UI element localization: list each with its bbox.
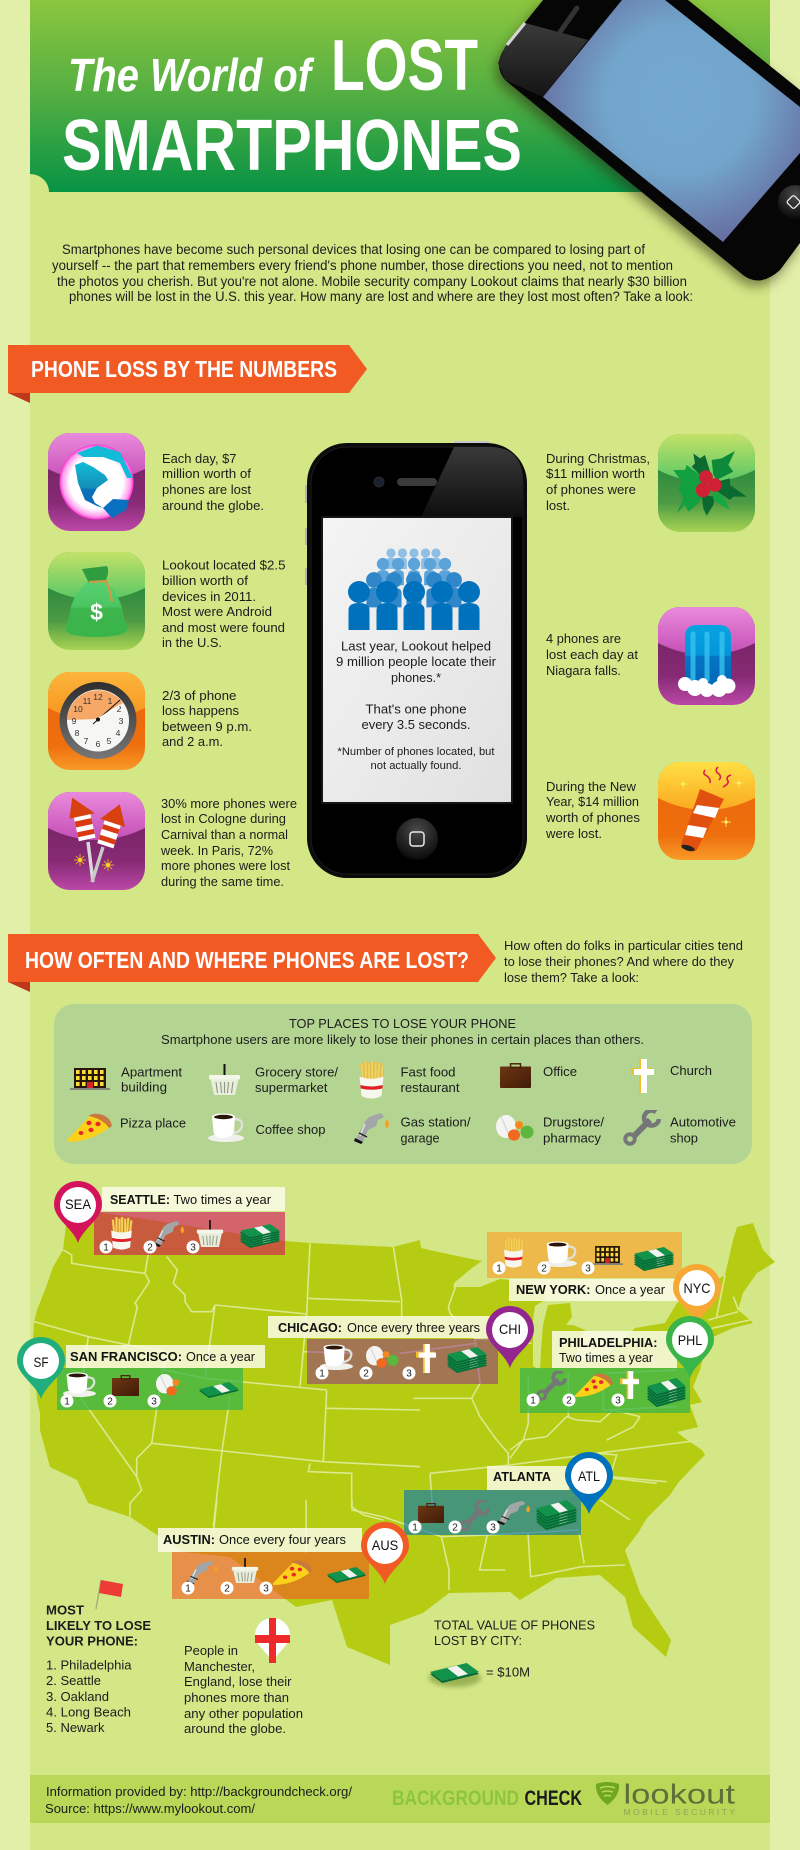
icon: basket xyxy=(209,1064,240,1095)
text xyxy=(546,631,638,678)
icon: office case xyxy=(112,1376,139,1396)
source text: Source: https://www.mylookout.com/ xyxy=(45,1801,255,1816)
legend heading: TOP PLACES TO LOSE YOUR PHONE xyxy=(289,1016,516,1031)
rank badges: 2 xyxy=(566,1396,572,1406)
pin: SF xyxy=(17,1337,65,1399)
icon: pills xyxy=(496,1115,534,1141)
icon: money bag xyxy=(48,552,145,650)
text: During Christmas, xyxy=(546,451,650,466)
icon: fries xyxy=(111,1217,132,1250)
city label xyxy=(110,1192,272,1207)
most likely to lose list: 2. Seattle xyxy=(46,1673,101,1688)
text xyxy=(160,796,297,889)
text: and 2 a.m. xyxy=(162,734,223,749)
city label: SAN FRANCISCO: xyxy=(70,1349,182,1364)
Manchester note: England, lose their xyxy=(184,1674,292,1689)
pin: NYC xyxy=(673,1264,721,1326)
text: 4 phones are xyxy=(546,631,621,646)
total value legend xyxy=(429,1618,595,1687)
text: of phones were xyxy=(546,482,636,497)
text xyxy=(162,688,252,749)
icon: clock: 3 xyxy=(119,716,124,726)
icon: church cross xyxy=(631,1059,654,1093)
city label xyxy=(163,1532,346,1547)
rank badges xyxy=(100,1240,200,1254)
stat: clock xyxy=(48,672,252,770)
rank badges xyxy=(182,1582,272,1594)
legend labels: Grocery store/ xyxy=(255,1064,338,1080)
legend labels: Fast food xyxy=(400,1064,456,1080)
text: Year, $14 million xyxy=(546,794,639,809)
icon: office case xyxy=(418,1504,444,1523)
screen text: That's one phone xyxy=(366,702,466,716)
intro paragraph: the photos you cherish. But you're not alone. Mobile security company Lookout claims that nearly $30 billion xyxy=(57,274,687,289)
icon: coffee xyxy=(208,1114,244,1142)
rank badges: 3 xyxy=(151,1396,157,1408)
icon: fries xyxy=(504,1237,524,1268)
city label: Two times a year xyxy=(559,1350,654,1365)
stat: money bag xyxy=(48,552,286,650)
city label: Once every three years xyxy=(347,1320,480,1335)
logo: Background Check: CHECK xyxy=(524,1787,582,1810)
legend labels: shop xyxy=(670,1130,698,1146)
most likely to lose list xyxy=(46,1602,151,1735)
pin: SEA xyxy=(54,1181,102,1243)
most likely to lose list: 1. Philadelphia xyxy=(46,1658,132,1672)
text: more phones were lost xyxy=(161,858,290,873)
rank badges: 2 xyxy=(147,1242,153,1254)
most likely to lose list: LIKELY TO LOSE xyxy=(46,1618,151,1633)
rank badges: 2 xyxy=(224,1584,230,1594)
rank badges: 3 xyxy=(490,1522,496,1534)
Manchester note: any other population xyxy=(184,1706,303,1721)
text: in the U.S. xyxy=(162,635,222,650)
total value legend: = $10M xyxy=(486,1664,530,1680)
panel: Seattle xyxy=(94,1187,285,1255)
title xyxy=(62,26,522,186)
icon: basket xyxy=(197,1220,223,1247)
icon: basket xyxy=(232,1558,258,1583)
city label: PHILADELPHIA: xyxy=(559,1335,658,1350)
text: 30% more phones were xyxy=(161,796,297,811)
text: devices in 2011. xyxy=(162,589,256,604)
icon: money xyxy=(634,1247,674,1271)
pin: AUS xyxy=(361,1522,409,1584)
pin: NYC: NYC xyxy=(684,1280,710,1296)
rank badges xyxy=(408,1520,500,1534)
legend labels: Coffee shop xyxy=(256,1122,326,1137)
Manchester note: People in xyxy=(184,1643,238,1658)
icon: England flag pin xyxy=(255,1618,290,1664)
stat: waterfall xyxy=(546,607,755,705)
total value legend: LOST BY CITY: xyxy=(434,1633,522,1648)
rank badges: 1 xyxy=(185,1584,191,1594)
panel: Chicago xyxy=(268,1316,498,1384)
text: phones are lost xyxy=(162,482,251,497)
rank badges: 3 xyxy=(190,1242,196,1254)
city label xyxy=(70,1349,256,1364)
city label: Once a year xyxy=(186,1349,256,1364)
stat: fireworks xyxy=(48,792,297,890)
most likely to lose list: MOST xyxy=(46,1602,84,1618)
icon: clock: 10 xyxy=(73,704,83,714)
panel: San Francisco xyxy=(57,1345,265,1410)
legend labels: pharmacy xyxy=(543,1130,602,1146)
icon: clock: 11 xyxy=(83,696,92,706)
text: during the same time. xyxy=(161,874,284,889)
source text xyxy=(45,1784,352,1816)
pin: PHL xyxy=(666,1316,714,1378)
pin: SF: SF xyxy=(34,1354,48,1370)
panel: Philadelphia xyxy=(520,1331,690,1413)
legend labels: Automotive xyxy=(670,1114,736,1130)
icon: money bag: $ xyxy=(90,599,103,625)
text: lost each day at xyxy=(546,647,638,662)
icon: wrench xyxy=(625,1111,659,1144)
Manchester note: phones more than xyxy=(184,1690,289,1705)
text: billion worth of xyxy=(162,573,248,588)
center phone xyxy=(305,441,527,878)
icon: money xyxy=(536,1500,577,1530)
icon: clock: 8 xyxy=(75,728,80,738)
section intro text xyxy=(504,938,743,985)
icon: money xyxy=(199,1382,239,1398)
text: Carnival than a normal xyxy=(161,827,288,842)
title: SMARTPHONES xyxy=(62,106,522,186)
section intro text: to lose their phones? And where do they xyxy=(504,954,734,969)
screen text xyxy=(336,638,497,772)
icon: money xyxy=(327,1567,366,1583)
text: were lost. xyxy=(545,826,602,841)
text: around the globe. xyxy=(162,498,264,513)
city label: SEATTLE: xyxy=(110,1192,170,1207)
text: Niagara falls. xyxy=(546,663,621,678)
text: 2/3 of phone xyxy=(162,688,236,703)
title: LOST xyxy=(331,26,478,106)
Manchester note xyxy=(184,1643,303,1736)
legend labels: Office xyxy=(543,1064,577,1079)
text: lost in Cologne during xyxy=(161,811,286,826)
Manchester note: Manchester, xyxy=(184,1659,255,1674)
icon: waterfall xyxy=(658,607,755,705)
tilted phone illustration xyxy=(496,0,800,286)
text xyxy=(162,558,286,650)
screen text: phones.* xyxy=(391,670,441,685)
stat: holly xyxy=(546,434,755,532)
rank badges: 3 xyxy=(263,1584,269,1594)
panel: Austin xyxy=(158,1528,369,1599)
screen text: 9 million people locate their xyxy=(336,654,497,669)
source text: Information provided by: http://backgroundcheck.org/ xyxy=(46,1784,352,1799)
icon: wrench xyxy=(538,1371,565,1399)
text: loss happens xyxy=(162,703,239,718)
city label: AUSTIN: xyxy=(163,1532,215,1547)
intro paragraph: yourself -- the part that remembers every friend's phone number, those directions you need, not to mention xyxy=(52,258,673,273)
icon: party popper xyxy=(658,762,755,860)
logo: Lookout xyxy=(596,1778,735,1817)
icon: pizza xyxy=(67,1114,112,1142)
rank badges: 1 xyxy=(319,1368,325,1380)
text: During the New xyxy=(546,779,637,794)
screen text: every 3.5 seconds. xyxy=(362,717,470,732)
icon: money xyxy=(447,1347,487,1373)
rank badges: 1 xyxy=(496,1264,502,1274)
text: between 9 p.m. xyxy=(162,719,252,734)
footer band xyxy=(30,1775,770,1823)
pin: SEA: SEA xyxy=(65,1196,92,1212)
icon: gas nozzle xyxy=(497,1501,530,1525)
icon: apartment xyxy=(70,1068,110,1090)
rank badges: 1 xyxy=(64,1396,70,1408)
rank badges xyxy=(526,1394,624,1406)
icon: apartment xyxy=(592,1246,623,1265)
icon: red flag xyxy=(96,1580,123,1609)
section intro text: lose them? Take a look: xyxy=(504,970,639,985)
most likely to lose list: 3. Oakland xyxy=(46,1689,109,1704)
screen text: not actually found. xyxy=(370,760,462,772)
icon: crowd of people xyxy=(348,548,480,630)
rank badges: 3 xyxy=(406,1368,412,1380)
icon: coffee xyxy=(543,1241,577,1267)
icon: clock: 6 xyxy=(96,739,101,749)
intro paragraph: phones will be lost in the U.S. this year. How many are lost and where are they lost most often? Take a look: xyxy=(69,289,693,304)
legend heading: Smartphone users are more likely to lose their phones in certain places than others. xyxy=(161,1032,644,1047)
pin: CHI xyxy=(486,1306,534,1368)
panel: top places legend xyxy=(54,1004,752,1164)
section banner: phone loss by the numbers xyxy=(8,345,367,403)
logo: Background Check: BACKGROUND xyxy=(392,1787,519,1810)
icon: coffee xyxy=(63,1372,96,1397)
icon: clock: 4 xyxy=(116,728,121,738)
icon: fireworks xyxy=(48,792,145,890)
icon: clock: 12 xyxy=(93,692,103,702)
icon: clock: 9 xyxy=(72,716,77,726)
city label: NEW YORK: xyxy=(516,1282,590,1297)
text: and most were found xyxy=(162,620,285,635)
city label: Once every four years xyxy=(219,1532,346,1547)
city label: Once a year xyxy=(595,1282,666,1297)
icon: home button xyxy=(396,818,438,860)
icon: money xyxy=(647,1378,686,1407)
legend labels: Gas station/ xyxy=(400,1114,471,1130)
screen text: *Number of phones located, but xyxy=(338,746,494,758)
icon: wrench xyxy=(461,1500,488,1530)
icon: gas nozzle xyxy=(186,1561,218,1585)
rank badges: 2 xyxy=(363,1368,369,1380)
icon: gas nozzle xyxy=(354,1113,389,1144)
rank badges xyxy=(492,1262,594,1274)
icon: cross xyxy=(416,1344,436,1373)
intro paragraph xyxy=(52,242,693,304)
icon: money xyxy=(429,1663,481,1687)
pin: ATL xyxy=(565,1452,613,1514)
icon: pills xyxy=(156,1374,189,1396)
legend labels: Apartment xyxy=(121,1064,182,1080)
city label xyxy=(559,1335,658,1365)
text: Lookout located $2.5 xyxy=(162,558,286,572)
rank badges: 1 xyxy=(530,1396,536,1406)
rank badges: 3 xyxy=(615,1396,621,1406)
icon: clock: 2 xyxy=(117,704,122,714)
Manchester note: around the globe. xyxy=(184,1721,286,1736)
section intro text: How often do folks in particular cities tend xyxy=(504,938,743,953)
section banner: how often and where: HOW OFTEN AND WHERE PHONES ARE LOST? xyxy=(25,947,469,973)
text: Each day, $7 xyxy=(162,451,236,466)
icon: office case xyxy=(500,1064,531,1088)
legend labels: Pizza place xyxy=(120,1116,186,1130)
pin: CHI: CHI xyxy=(499,1321,521,1337)
icon: pizza xyxy=(575,1374,613,1397)
stat: globe xyxy=(48,433,264,531)
icon: gas nozzle xyxy=(153,1221,184,1247)
icon: money xyxy=(240,1224,280,1248)
pin: AUS: AUS xyxy=(372,1537,398,1553)
rank badges: 3 xyxy=(585,1264,591,1274)
legend labels: Church xyxy=(670,1063,712,1078)
legend labels: garage xyxy=(400,1130,440,1146)
legend heading xyxy=(161,1016,644,1047)
icon: globe xyxy=(48,433,145,531)
legend labels: supermarket xyxy=(255,1080,328,1095)
icon: cross xyxy=(620,1371,639,1399)
icon: clock: 5 xyxy=(107,736,112,746)
text: million worth of xyxy=(162,466,251,481)
rank badges: 1 xyxy=(103,1242,109,1254)
rank badges: 1 xyxy=(412,1522,418,1534)
section banner: how often and where xyxy=(8,934,496,992)
logo: Lookout: MOBILE SECURITY xyxy=(624,1807,735,1817)
city label: CHICAGO: xyxy=(278,1320,342,1335)
pin: PHL: PHL xyxy=(678,1332,702,1348)
icon: pills xyxy=(366,1346,399,1368)
rank badges xyxy=(316,1366,416,1380)
rank badges xyxy=(60,1394,160,1408)
icon: clock: 1 xyxy=(108,696,113,706)
screen text: Last year, Lookout helped xyxy=(341,638,491,654)
icon: clock xyxy=(48,672,145,770)
rank badges: 2 xyxy=(452,1522,458,1534)
title: The World of xyxy=(68,49,315,101)
city label xyxy=(516,1282,666,1297)
legend labels: Drugstore/ xyxy=(543,1114,604,1130)
most likely to lose list: 5. Newark xyxy=(46,1720,105,1735)
rank badges: 2 xyxy=(541,1264,547,1274)
intro paragraph: Smartphones have become such personal devices that losing one can be compared to losing part of xyxy=(62,242,645,257)
text: week. In Paris, 72% xyxy=(160,843,273,858)
icon: coffee xyxy=(320,1344,353,1370)
text: Most were Android xyxy=(162,604,272,619)
icon: fries xyxy=(360,1061,384,1098)
text: worth of phones xyxy=(545,810,640,825)
text xyxy=(162,451,264,513)
logo: Lookout: lookout xyxy=(624,1778,735,1810)
rank badges: 2 xyxy=(107,1396,113,1408)
section banner: phone loss by the numbers: PHONE LOSS BY THE NUMBERS xyxy=(31,356,337,382)
icon: pizza xyxy=(273,1561,312,1585)
map of the United States xyxy=(33,1212,775,1665)
legend labels: building xyxy=(121,1080,167,1094)
most likely to lose list: 4. Long Beach xyxy=(46,1704,131,1720)
text xyxy=(545,779,640,841)
pin: ATL: ATL xyxy=(578,1468,600,1484)
legend labels xyxy=(120,1063,736,1146)
legend labels: restaurant xyxy=(400,1080,460,1095)
total value legend: TOTAL VALUE OF PHONES xyxy=(434,1618,595,1632)
text xyxy=(546,451,650,513)
city label: ATLANTA xyxy=(493,1469,552,1484)
text: $11 million worth xyxy=(546,466,645,481)
icon: holly xyxy=(658,434,755,532)
city label xyxy=(278,1320,480,1335)
stat: party popper xyxy=(545,762,755,860)
panel: Atlanta xyxy=(404,1466,581,1535)
header banner xyxy=(30,0,770,192)
panel: New York xyxy=(487,1232,682,1301)
text: lost. xyxy=(546,498,570,513)
most likely to lose list: YOUR PHONE: xyxy=(46,1634,138,1648)
city label: Two times a year xyxy=(174,1192,272,1207)
icon: clock: 7 xyxy=(84,736,89,746)
